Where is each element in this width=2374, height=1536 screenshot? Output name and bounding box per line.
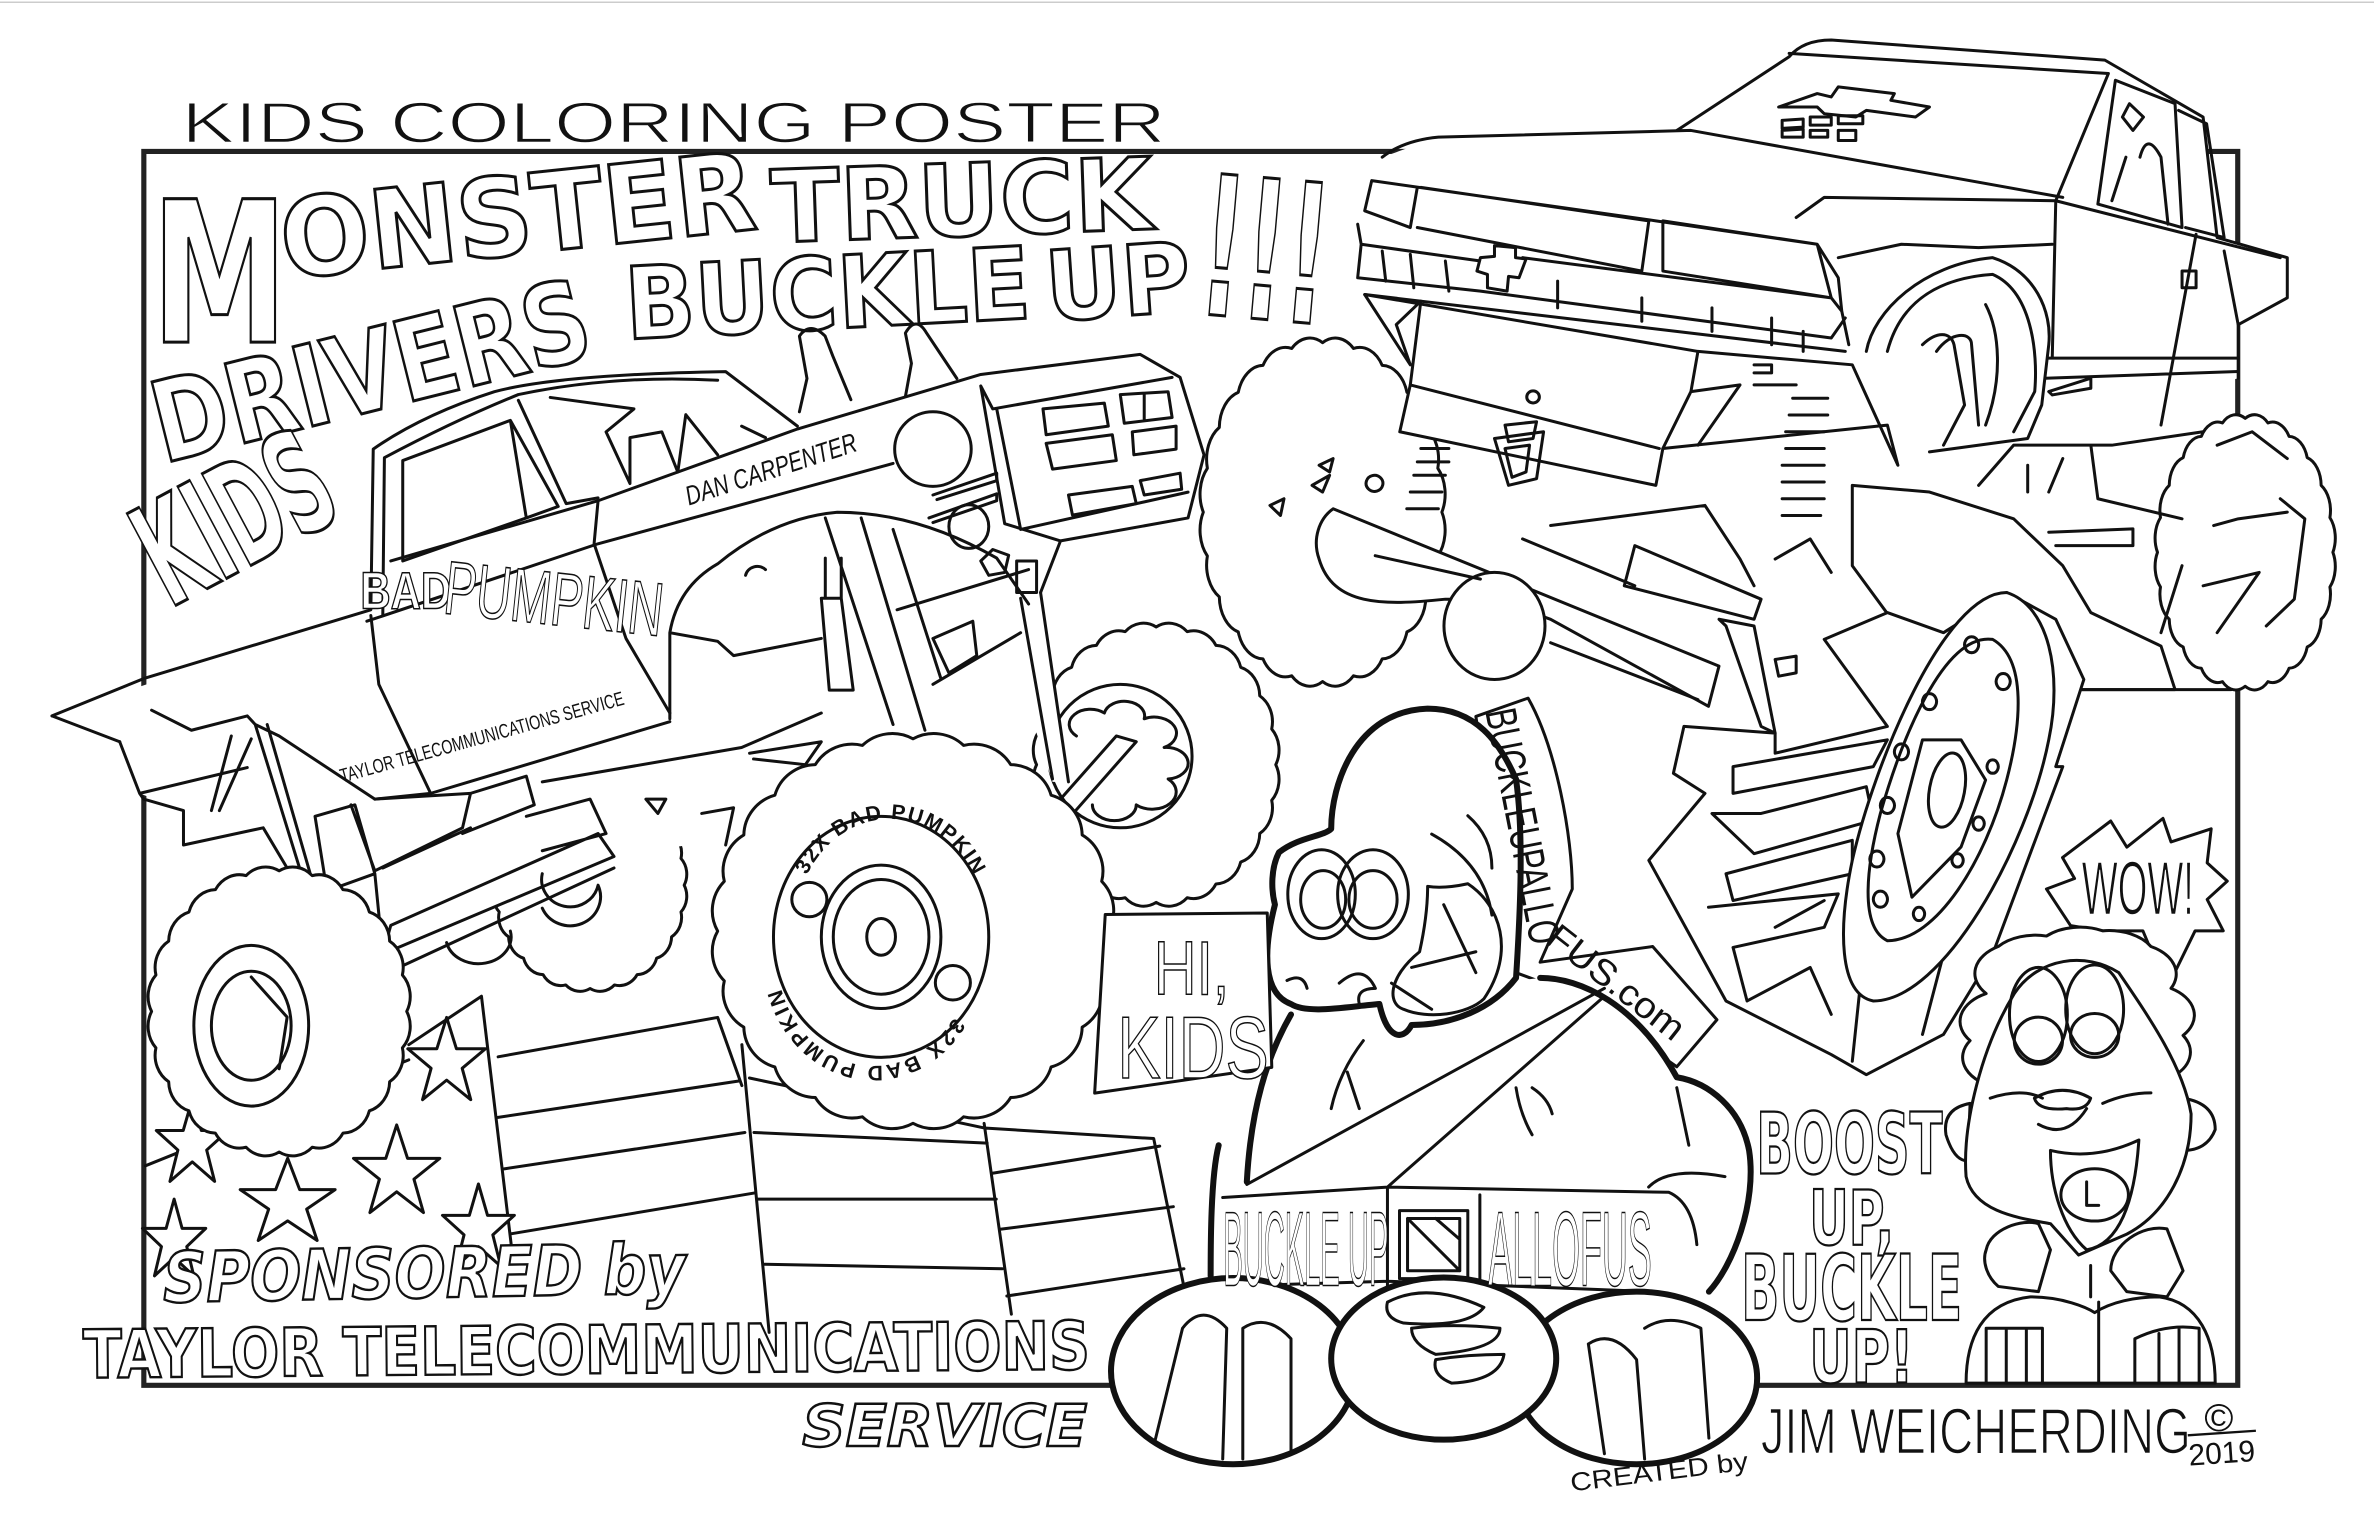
rear undercarriage: [1852, 485, 2175, 767]
back wheel: left truck: [493, 779, 687, 991]
cartoon child and wow burst: [1945, 818, 2227, 1383]
child ears: [1945, 1098, 2215, 1161]
slogan: boost up buckle up: BUCKLE: [1741, 1237, 1962, 1342]
cab body: [1358, 40, 2287, 459]
big right tire: [1649, 592, 2084, 1075]
credit: created by jim weicherding 2019: ©: [2204, 1396, 2233, 1440]
body side strips: [367, 354, 1204, 793]
sponsor: taylor telecommunications service: SPONSORED by: [162, 1229, 688, 1319]
mascot group: [1111, 698, 1757, 1464]
right monster truck: [1200, 40, 2335, 1075]
title: monster truck drivers buckle up: !!!: [1192, 134, 1338, 370]
wheel arch: [1796, 197, 2056, 452]
credit: created by jim weicherding 2019: [1569, 1394, 2256, 1497]
left monster truck: [52, 354, 1279, 1156]
big front wheel: [712, 734, 1114, 1129]
text: telecom service on door: TAYLOR TELECOMMUNICATIONS SERVICE: [338, 688, 627, 788]
sponsor: taylor telecommunications service: TAYLOR TELECOMMUNICATIONS: [83, 1307, 1090, 1394]
mascot head: [1267, 709, 1521, 1035]
band lettering: buckleupallofus.com: FUS.com: [1539, 916, 1693, 1049]
credit: created by jim weicherding 2019: 2019: [2187, 1435, 2256, 1473]
slogan: boost up buckle up: UP!: [1809, 1316, 1914, 1400]
wheel arch and suspension: [670, 512, 1068, 782]
child body and knees: [1966, 1297, 2215, 1383]
child head: [1966, 960, 2191, 1255]
coil springs: [1407, 398, 1828, 515]
exhaust stacks: [799, 324, 957, 412]
child leg stripes: [1986, 1327, 2199, 1383]
valance and tow hook: [1365, 294, 1898, 485]
flag: [142, 996, 1184, 1332]
slogan: boost up buckle up: BOOST: [1756, 1094, 1943, 1193]
wow lettering: WOW!: [2082, 846, 2194, 931]
sign: hi kids: KIDS: [1117, 999, 1269, 1097]
belt buckle: [1400, 1211, 1468, 1279]
title: monster truck drivers buckle up: ONSTER: [274, 128, 762, 304]
wheel lettering: 32X bad pumpkin: [768, 804, 986, 1080]
front headlights, grille, bumper: [1358, 181, 1849, 351]
right wheel: left truck: [1033, 623, 1279, 906]
wow burst: [2046, 818, 2227, 988]
chevy bowtie logo: [1779, 87, 1929, 140]
text: bad pumpkin: BAD: [360, 562, 451, 620]
mascot body: [1211, 978, 1749, 1292]
seat belt: [1223, 988, 1725, 1292]
heading: kids coloring poster: KIDS COLORING POSTER: [182, 91, 1166, 155]
credit: created by jim weicherding 2019: CREATED by: [1569, 1448, 1750, 1497]
lower chassis: [120, 710, 821, 971]
sponsor: taylor telecommunications service: [83, 1229, 1090, 1460]
child hair: [1960, 927, 2194, 1088]
title: monster truck drivers buckle up: DRIVERS: [139, 255, 603, 489]
left front wheel: [148, 867, 410, 1156]
near front tire: [1200, 338, 1445, 686]
title: monster truck drivers buckle up: [139, 128, 1338, 489]
far wheel: [2155, 415, 2335, 690]
sponsor: taylor telecommunications service: SERVICE: [802, 1393, 1087, 1460]
wheel lettering: 32X bad pumpkin: 32X BAD PUMPKIN: [768, 990, 964, 1080]
hands and feet: [1111, 1278, 1757, 1464]
child hands: [1985, 1222, 2183, 1297]
band lettering: buckleupallofus.com: [1475, 704, 1693, 1049]
poster frame: [144, 151, 2238, 1385]
sign: hi kids: HI,: [1154, 927, 1229, 1012]
wheel lettering: 32X bad pumpkin: 32X BAD PUMPKIN: [796, 804, 986, 874]
slogan: boost up buckle up: UP,: [1809, 1175, 1894, 1263]
title: monster truck drivers buckle up: TRUCK: [769, 136, 1158, 266]
title: monster truck drivers buckle up: UP: [1041, 221, 1194, 344]
cab outline and windows: [52, 372, 797, 742]
title word: kids: KIDS: [108, 398, 362, 639]
sign: hi kids: [1095, 913, 1272, 1097]
cab, windshield and windows: [1382, 40, 2287, 425]
text: bad pumpkin: PUMPKIN: [440, 546, 668, 653]
title: monster truck drivers buckle up: M: [151, 160, 288, 389]
title: monster truck drivers buckle up: BUCKLE: [622, 225, 1033, 363]
band lettering: buckleupallofus.com: BUCKLEUPALLO: [1475, 704, 1569, 948]
slogan: boost up buckle up: [1741, 1094, 1962, 1400]
axle: [1316, 505, 1831, 733]
website band: [1476, 698, 1717, 1067]
text: dan carpenter: DAN CARPENTER: [681, 427, 861, 511]
text: bad pumpkin: [360, 546, 668, 653]
text: ALLOFUS: [1488, 1190, 1652, 1308]
child face: [1990, 965, 2151, 1383]
credit: created by jim weicherding 2019: JIM WEICHERDING: [1761, 1394, 2191, 1467]
belt lettering: BUCKLE UP: [1223, 1190, 1388, 1308]
grille: [895, 377, 1188, 593]
truck body: [52, 354, 1204, 954]
